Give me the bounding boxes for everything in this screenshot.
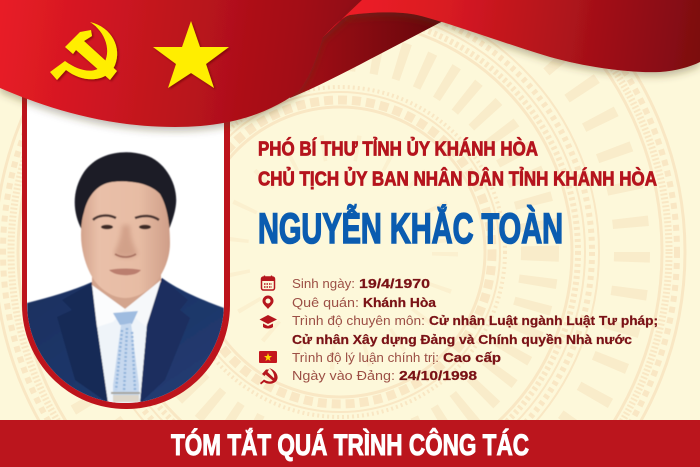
frame: red arch border: [22, 90, 230, 409]
photo: portrait of Nguyễn Khắc Toàn: [27, 90, 224, 410]
row: birth date: [292, 276, 430, 291]
personal information list: [259, 276, 658, 384]
ribbon: main left sweep: [0, 0, 365, 127]
tie: [113, 311, 138, 325]
row: home town: Quê quán:: [292, 295, 359, 310]
collar: [92, 285, 125, 327]
icon: hammer and sickle: [50, 22, 117, 80]
row: home town: [292, 295, 437, 310]
row: birth date: 19/4/1970: [359, 276, 430, 291]
row: party admission date: 24/10/1998: [399, 368, 477, 383]
red ribbon header: [0, 0, 700, 127]
portrait frame with photo: [22, 90, 230, 410]
heading: positions: [258, 136, 657, 190]
banner title: TÓM TẮT QUÁ TRÌNH CÔNG TÁC: [171, 428, 529, 462]
row: political theory: Cao cấp: [443, 350, 501, 365]
icon: graduation cap: [260, 315, 277, 328]
footer banner: [0, 420, 700, 467]
icon: yellow star: [153, 21, 229, 88]
row: birth date: Sinh ngày:: [292, 276, 355, 291]
suit: [27, 278, 224, 410]
row: education line 1: Trình độ chuyên môn:: [292, 313, 425, 328]
shirt: [92, 280, 161, 404]
face: [81, 181, 170, 298]
position line 1: PHÓ BÍ THƯ TỈNH ỦY KHÁNH HÒA: [258, 136, 538, 160]
icon: calendar: [262, 276, 274, 290]
row: home town: Khánh Hòa: [363, 295, 437, 310]
row: education line 1: Cử nhân Luật ngành Luật Tư pháp;: [429, 313, 658, 328]
row: political theory: [292, 350, 501, 365]
row: party admission date: Ngày vào Đảng:: [292, 368, 395, 383]
brows: [93, 216, 116, 220]
icon: Vietnam flag: [259, 351, 277, 363]
neck: [91, 274, 162, 310]
hair: [75, 152, 176, 232]
ribbon: top right sweep: [323, 0, 700, 72]
nose: [114, 225, 138, 258]
row: education line 1: [292, 313, 658, 328]
icon: small hammer and sickle: [260, 368, 278, 384]
row: party admission date: [292, 368, 477, 383]
icon: location pin: [262, 296, 274, 309]
row: political theory: Trình độ lý luận chính trị:: [292, 350, 439, 365]
lapels: [57, 283, 108, 403]
row: education line 2: Cử nhân Xây dựng Đảng và Chính quyền Nhà nước: [292, 332, 632, 347]
ribbon: dark back fold: [290, 0, 445, 98]
eyes: [101, 225, 113, 229]
mouth: [109, 268, 141, 275]
heading: name: NGUYỄN KHẮC TOÀN: [258, 204, 563, 253]
banner background: [0, 420, 700, 467]
